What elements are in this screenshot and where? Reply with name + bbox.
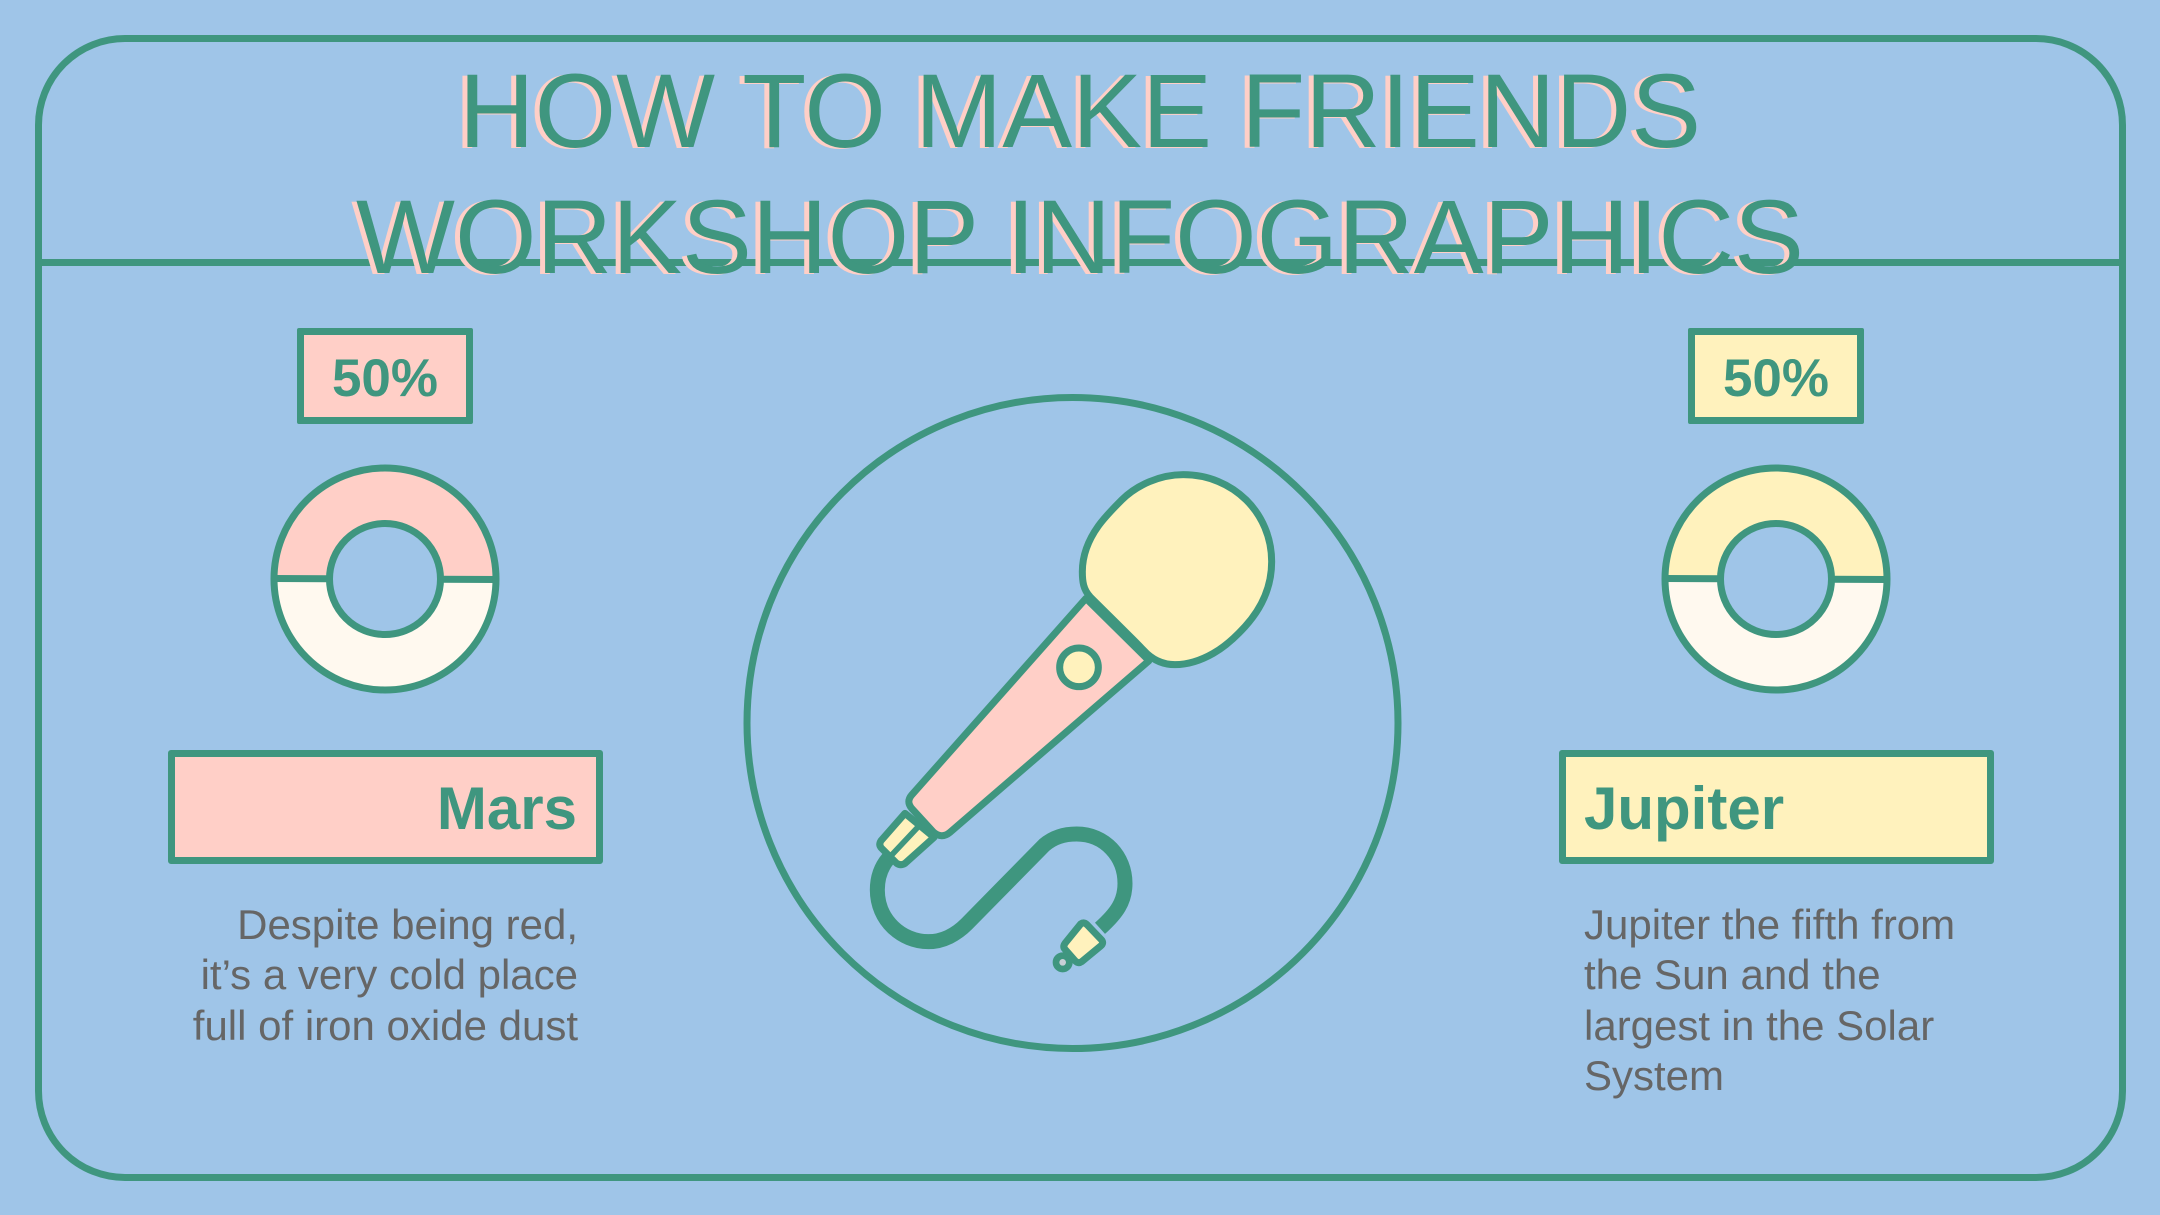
text: Jupiter description	[1584, 901, 1955, 1099]
label bar: Jupiter: Jupiter	[1584, 775, 1784, 842]
title: WORKSHOP INFOGRAPHICS	[356, 179, 1804, 296]
label bar: Mars: Mars	[437, 775, 577, 842]
donut chart: Mars 50%	[270, 464, 500, 694]
icon: microphone in circle	[744, 394, 1402, 1052]
title: HOW TO MAKE FRIENDS	[459, 53, 1701, 170]
donut chart: Jupiter 50%	[1662, 464, 1890, 694]
badge: Jupiter percentage	[1688, 328, 1864, 424]
badge: Mars percentage	[297, 328, 473, 424]
text: Jupiter description: the Sun and the	[1584, 951, 1881, 998]
text: Mars description: Despite being red,	[237, 901, 578, 948]
panel: Mars	[168, 328, 603, 1049]
badge: Jupiter percentage: 50%	[1723, 349, 1829, 408]
label bar: Mars	[168, 750, 603, 864]
text: Jupiter description: System	[1584, 1052, 1724, 1099]
title	[352, 53, 1804, 296]
text: Mars description: it’s a very cold place	[201, 951, 578, 998]
circle outline	[747, 398, 1398, 1048]
text: Mars description	[193, 901, 578, 1049]
label bar: Jupiter	[1559, 750, 1994, 864]
text: Jupiter description: largest in the Solar	[1584, 1002, 1934, 1049]
panel: Jupiter	[1559, 328, 1994, 1099]
cable and plugs	[877, 813, 1125, 969]
header divider line	[40, 259, 2121, 266]
microphone body and head	[909, 475, 1272, 836]
badge: Mars percentage: 50%	[332, 349, 438, 408]
text: Jupiter description: Jupiter the fifth from	[1584, 901, 1955, 948]
text: Mars description: full of iron oxide dust	[193, 1002, 578, 1049]
